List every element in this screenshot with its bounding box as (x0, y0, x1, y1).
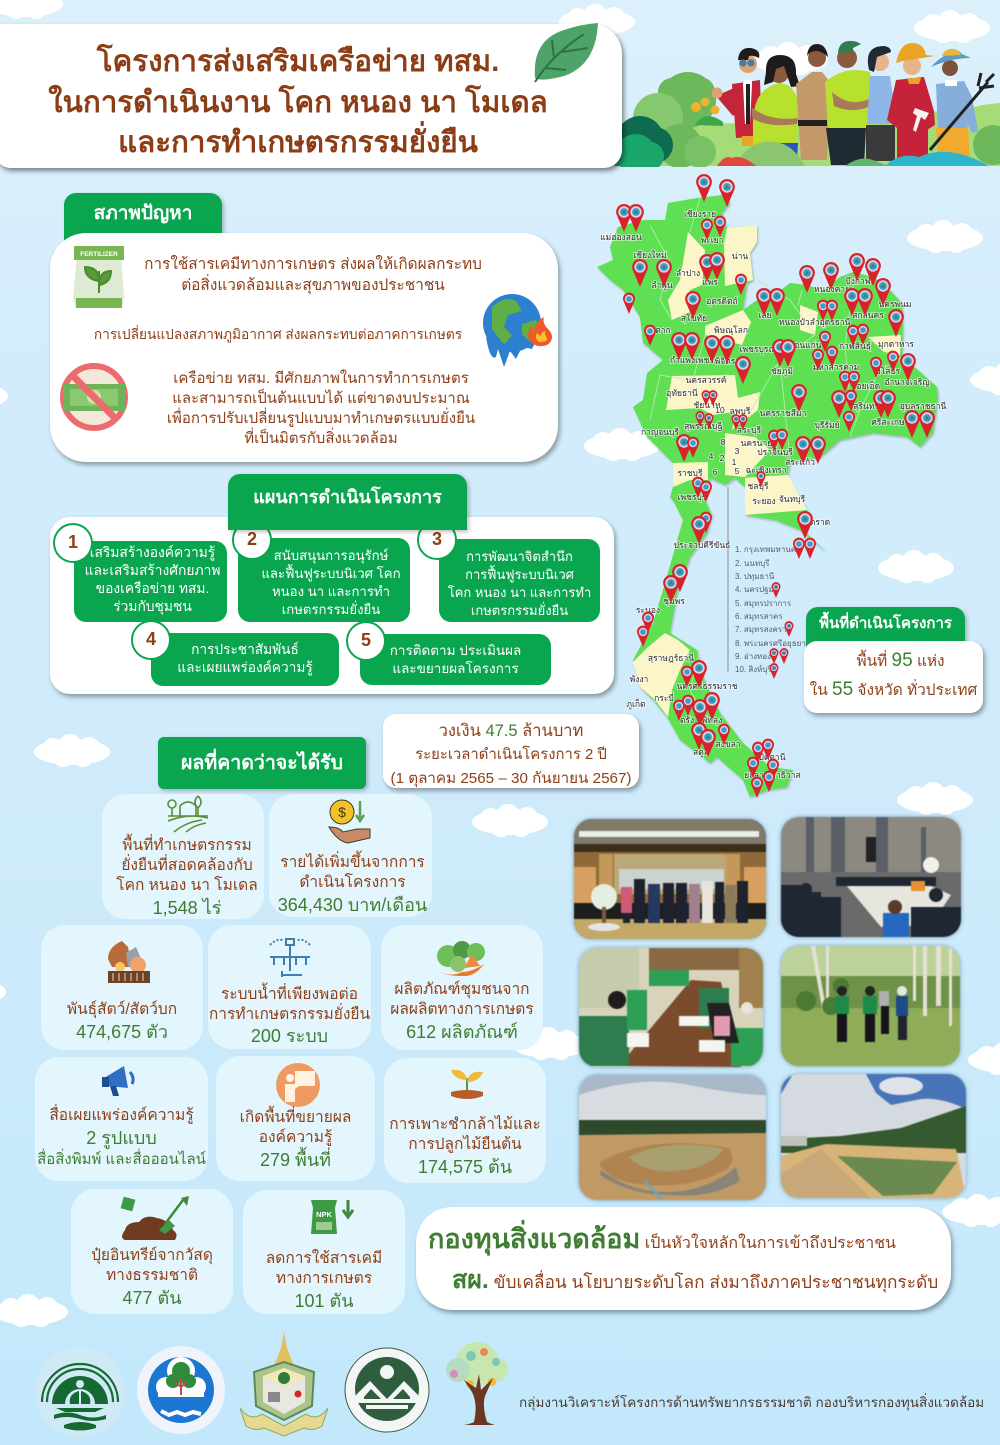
province labels: ร้อยเอ็ด (852, 380, 880, 391)
province labels: พิษณุโลก (714, 325, 748, 336)
panel: plan (50, 517, 614, 694)
province labels: แม่ฮ่องสอน (600, 232, 642, 242)
province labels: อุทัยธานี (666, 388, 698, 399)
icon: sprinkler (269, 938, 311, 977)
text: network potential (167, 370, 475, 447)
province labels: สตูล (693, 747, 709, 758)
card text: 477 ตัน (122, 1288, 182, 1308)
logo: department of environmental quality promotion (35, 1347, 125, 1437)
card: extension areas (216, 1056, 375, 1181)
card text: สื่อเผยแพร่องค์ความรู้ (49, 1107, 194, 1124)
province labels: เชียงใหม่ (633, 250, 667, 260)
fund statement panel (416, 1207, 951, 1310)
person 3 khaki uniform (796, 44, 830, 160)
icon: leaf (534, 23, 598, 82)
province labels: ราชบุรี (677, 468, 703, 479)
budget text: วงเงิน 47.5 ล้านบาท (439, 722, 583, 740)
province labels: สระบุรี (737, 425, 762, 436)
icon: vegetables (436, 941, 485, 976)
title: ในการดำเนินงาน โคก หนอง นา โมเดล (48, 86, 548, 118)
card text (209, 982, 370, 1046)
statement line 2: สผ. ขับเคลื่อน นโยบายระดับโลก ส่งมาถึงภาคประชาชนทุกระดับ (452, 1266, 938, 1294)
number 1: 1 (68, 532, 78, 552)
card text: 2 รูปแบบ (86, 1128, 157, 1148)
budget text: ระยะเวลาดำเนินโครงการ 2 ปี (415, 747, 607, 763)
card text: รายได้เพิ่มขึ้นจากการ (280, 854, 425, 871)
card text: ผลิตภัณฑ์ชุมชนจาก (394, 981, 530, 998)
province labels: เชียงราย (684, 209, 716, 219)
card text: เกิดพื้นที่ขยายผล (240, 1109, 351, 1126)
card text (266, 1249, 382, 1311)
province labels: พังงา (630, 674, 648, 684)
province labels: 4 (709, 451, 714, 461)
province labels: ลำปาง (676, 268, 700, 278)
province labels: บุรีรัมย์ (814, 420, 840, 431)
card: reduced chemicals (243, 1190, 405, 1314)
card text: ยั่งยืนที่สอดคล้องกับ (121, 857, 253, 874)
text: area count (810, 650, 978, 700)
card text: 474,675 ตัว (76, 1022, 168, 1042)
plan step 1: ของเครือข่าย ทสม. (96, 581, 209, 596)
central province list: 9. อ่างทอง (735, 652, 771, 661)
icon: coin in hand: $ (338, 804, 346, 820)
banner illustration: people and greenery (612, 40, 1000, 167)
number 2 (232, 520, 272, 560)
card text: การปลูกไม้ยืนต้น (408, 1136, 522, 1153)
card: seedlings (384, 1058, 546, 1183)
section tab: project area: พื้นที่ดำเนินโครงการ (819, 615, 952, 632)
card text: 101 ตัน (294, 1291, 354, 1311)
province labels: สระแก้ว (785, 457, 815, 467)
card: sustainable farm area (102, 794, 264, 919)
section tab: expected results (158, 737, 366, 789)
central province list: 6. สมุทรสาคร (735, 612, 783, 621)
section tab: problems: สภาพปัญหา (94, 203, 192, 224)
card text: การเพาะชำกล้าไม้และ (389, 1116, 541, 1133)
panel: project area (804, 641, 983, 713)
icon: NPK bag: NPK (316, 1210, 332, 1219)
province labels: ชุมพร (663, 596, 685, 607)
title: และการทำเกษตรกรรมยั่งยืน (118, 126, 478, 159)
number 5: 5 (361, 630, 371, 650)
icon: fertilizer bag: FERTILIZER (80, 251, 118, 258)
card text (67, 1000, 177, 1042)
text: chemical impact: ต่อสิ่งแวดล้อมและสุขภาพของประชาชน (181, 277, 445, 294)
province labels: ปัตตานี (758, 752, 786, 762)
province labels: เพชรบุรี (678, 492, 707, 503)
budget text (391, 722, 631, 788)
icon: coin in hand (328, 800, 370, 844)
province labels: อุบลราชธานี (900, 401, 946, 412)
province labels: ระนอง (636, 605, 660, 615)
icon: seedling (451, 1070, 483, 1099)
province labels: 6 (713, 467, 718, 477)
card text: ผลผลิตทางการเกษตร (390, 1001, 534, 1018)
plan step 2: และฟื้นฟูระบบนิเวศ โคก (261, 566, 401, 581)
plan step 4 (151, 633, 339, 686)
card: community products (381, 925, 543, 1050)
icon: field (167, 795, 208, 833)
section tab: plan (228, 474, 467, 530)
province labels: ฉะเชิงเทรา (745, 465, 787, 475)
province labels: ตราด (810, 517, 830, 527)
card text: ปุ๋ยอินทรีย์จากวัสดุ (91, 1247, 213, 1264)
card text: 200 ระบบ (251, 1026, 328, 1046)
province labels: หนองคาย (814, 284, 850, 294)
province labels: กระบี่ (654, 692, 674, 703)
site pins (616, 174, 935, 798)
title (48, 44, 548, 159)
province boundaries (650, 198, 902, 720)
person 1 red jacket (712, 48, 762, 146)
icon: teacher (276, 1063, 320, 1107)
province labels: เพชรบูรณ์ (740, 344, 776, 355)
province labels: อุตรดิตถ์ (706, 296, 738, 307)
province labels: ระยอง (752, 496, 776, 506)
icon: animals (108, 941, 150, 983)
card text: 174,575 ต้น (418, 1157, 512, 1177)
plan step 3: การฟื้นฟูระบบนิเวศ (465, 567, 574, 582)
province labels: แพร่ (702, 277, 718, 287)
province labels: นครราชสีมา (760, 408, 806, 418)
province labels: พะเยา (701, 235, 723, 245)
province labels: อุดรธานี (820, 317, 851, 328)
budget callout (383, 714, 639, 788)
province labels (600, 209, 946, 780)
card text (389, 1115, 541, 1177)
province labels: เลย (758, 310, 772, 320)
province labels: มุกดาหาร (878, 339, 914, 350)
plan step 5 (360, 634, 551, 685)
statement line 1: กองทุนสิ่งแวดล้อม เป็นหัวใจหลักในการเข้าถึงประชาชน (428, 1224, 896, 1254)
icon: no money (60, 363, 128, 431)
logo: natural resources and environment office (137, 1346, 225, 1434)
text: network potential: ที่เป็นมิตรกับสิ่งแวดล้อม (244, 430, 398, 447)
province labels: สุรินทร์ (853, 401, 879, 412)
card text: 279 พื้นที่ (260, 1150, 331, 1170)
text: network potential: และสามารถเป็นต้นแบบได้ แต่ขาดงบประมาณ (172, 390, 470, 407)
central province list: 4. นครปฐม (735, 585, 774, 594)
central province list: 8. พระนครศรีอยุธยา (735, 639, 806, 648)
map of Thailand (597, 174, 947, 799)
card: water system (208, 925, 371, 1049)
icon: compost and shovel (120, 1196, 189, 1240)
plan step 4: และเผยแพร่องค์ความรู้ (177, 660, 313, 675)
province labels: 5 (735, 466, 740, 476)
person 7 farmer with fork (930, 49, 994, 162)
province labels: นครนายก (741, 438, 777, 448)
province labels: หนองบัวลำภู (779, 317, 826, 328)
province labels: จันทบุรี (779, 494, 806, 505)
card: income (269, 794, 432, 917)
plan step 5: และขยายผลโครงการ (392, 661, 519, 676)
card text: พื้นที่ทำเกษตรกรรม (122, 837, 252, 854)
card text (390, 980, 534, 1042)
list divider (727, 487, 729, 672)
province labels: นครศรีธรรมราช (676, 681, 738, 691)
province labels: พิจิตร (715, 356, 736, 366)
plan step 1: ร่วมกับชุมชน (113, 599, 192, 614)
province labels: ปราจีนบุรี (757, 447, 793, 458)
plan step 4: การประชาสัมพันธ์ (191, 642, 299, 657)
person 6 red jacket and hat (887, 43, 935, 160)
card text: การทำเกษตรกรรมยั่งยืน (209, 1006, 370, 1022)
plan step 3 (439, 539, 600, 622)
plan step 5: การติดตาม ประเมินผล (390, 643, 521, 658)
logo: provincial crest (240, 1332, 328, 1436)
province labels: 10 (715, 405, 725, 415)
province labels: สงขลา (715, 739, 741, 749)
central province list: 3. ปทุมธานี (735, 572, 775, 581)
card: livestock (41, 925, 203, 1050)
card text: องค์ความรู้ (259, 1129, 332, 1146)
card text (91, 1246, 213, 1308)
card: organic fertilizer (71, 1189, 233, 1314)
number 5 (346, 621, 386, 661)
cream provinces (633, 225, 901, 717)
province labels: กาญจนบุรี (641, 427, 679, 438)
photo: seminar round table (781, 817, 961, 937)
province labels: น่าน (732, 251, 748, 261)
card: media (35, 1057, 208, 1181)
card text (116, 834, 258, 918)
province labels: กาฬสินธุ์ (839, 341, 871, 352)
text: network potential: เพื่อการปรับเปลี่ยนรูปแบบมาทำเกษตรแบบยั่งยืน (167, 410, 475, 427)
person 4 lime polo and cap (825, 41, 877, 165)
title: โครงการส่งเสริมเครือข่าย ทสม. (97, 45, 499, 78)
province labels: ลำพูน (651, 280, 673, 291)
photo: group at meeting room (574, 819, 766, 939)
card text: 1,548 ไร่ (153, 898, 221, 918)
number 2: 2 (247, 529, 257, 549)
plan step 3: การพัฒนาจิตสำนึก (466, 549, 573, 564)
province labels: ขอนแก่น (788, 340, 822, 350)
province labels: ยโสธร (876, 366, 901, 376)
central province list: 1. กรุงเทพมหานคร (735, 545, 801, 554)
text: area count: พื้นที่ 95 แห่ง (856, 650, 945, 671)
card text: ลดการใช้สารเคมี (266, 1250, 382, 1267)
province labels: สุราษฎร์ธานี (648, 653, 694, 664)
person 2 lime polo (752, 55, 800, 159)
province labels: 9 (718, 423, 723, 433)
number 3 (417, 520, 457, 560)
central province list: 5. สมุทรปราการ (735, 599, 792, 608)
province labels: สกลนคร (852, 310, 884, 320)
section tab: plan: แผนการดำเนินโครงการ (253, 487, 442, 507)
icon: megaphone (102, 1066, 135, 1096)
text: chemical impact: การใช้สารเคมีทางการเกษตร ส่งผลให้เกิดผลกระทบ (144, 256, 482, 273)
photo: walking in the forest (781, 946, 960, 1066)
number 1 (53, 523, 93, 563)
province labels: ชลบุรี (748, 481, 769, 492)
card text (278, 850, 427, 915)
province labels: กำแพงเพชร (670, 355, 714, 365)
number 4: 4 (146, 629, 156, 649)
number 4 (131, 620, 171, 660)
card text (37, 1104, 206, 1168)
province labels: บึงกาฬ (845, 276, 872, 286)
text: network potential: เครือข่าย ทสม. มีศักยภาพในการทำการเกษตร (173, 370, 469, 387)
province labels: ยะลา (744, 770, 764, 780)
province labels: ภูเก็ต (626, 698, 646, 710)
province labels: นครสวรรค์ (686, 375, 726, 385)
logo: community tree (446, 1342, 508, 1425)
province labels: มหาสารคาม (813, 362, 859, 372)
plan step 3: โคก หนอง นา และการทำ (448, 585, 591, 600)
map land (597, 195, 938, 797)
number 3: 3 (432, 529, 442, 549)
section tab: project area (806, 607, 965, 650)
card text: สื่อสิ่งพิมพ์ และสื่อออนไลน์ (37, 1151, 206, 1168)
photo: pond construction (579, 1075, 766, 1200)
province labels: ศรีสะเกษ (871, 417, 905, 427)
section tab: problems (64, 193, 222, 245)
plan step 2 (238, 538, 410, 622)
plan step 1 (74, 541, 227, 622)
text: chemical impact (144, 255, 482, 294)
text: climate change: การเปลี่ยนแปลงสภาพภูมิอากาศ ส่งผลกระทบต่อภาคการเกษตร (94, 327, 462, 342)
logo: local administration seal (344, 1348, 430, 1432)
section tab: expected results: ผลที่คาดว่าจะได้รับ (181, 752, 343, 774)
plan step 1: และเสริมสร้างศักยภาพ (85, 563, 220, 578)
province labels: นครพนม (878, 299, 912, 309)
province labels: ตาก (655, 325, 671, 335)
province labels: อำนาจเจริญ (884, 377, 930, 387)
card text (240, 1106, 351, 1170)
card text: โคก หนอง นา โมเดล (116, 877, 258, 894)
card text: 364,430 บาท/เดือน (278, 895, 427, 915)
footer credit: กลุ่มงานวิเคราะห์โครงการด้านทรัพยากรธรรมชาติ กองบริหารกองทุนสิ่งแวดล้อม (519, 1395, 984, 1410)
central province list: 10. สิงห์บุรี (735, 664, 772, 674)
central province list: 2. นนทบุรี (735, 559, 770, 568)
province labels: 2 (720, 453, 725, 463)
icon: fertilizer bag (73, 246, 124, 308)
photo: green pond (781, 1074, 966, 1198)
card text: 612 ผลิตภัณฑ์ (406, 1022, 518, 1042)
province labels: ลพบุรี (730, 406, 751, 417)
province labels: ประจวบคีรีขันธ์ (674, 540, 730, 550)
photo: community meeting table (579, 948, 763, 1067)
province labels: นราธิวาส (765, 770, 801, 780)
province labels: ตรัง (680, 715, 694, 725)
text: area count: ใน 55 จังหวัด ทั่วประเทศ (810, 679, 977, 700)
province labels: 3 (735, 446, 740, 456)
plan step 1: เสริมสร้างองค์ความรู้ (90, 545, 215, 560)
card text: ทางธรรมชาติ (106, 1267, 198, 1284)
province labels: ชัยภูมิ (771, 366, 793, 377)
plan step 2: เกษตรกรรมยั่งยืน (282, 602, 380, 617)
province labels: 8 (721, 437, 726, 447)
central province list (735, 545, 806, 674)
person 5 blue shirt (866, 46, 897, 161)
plan step 2: สนับสนุนการอนุรักษ์ (274, 548, 388, 563)
title panel (0, 24, 622, 168)
card text: ดำเนินโครงการ (299, 874, 406, 891)
plan step 2: หนอง นา และการทำ (272, 584, 390, 599)
card text: พันธุ์สัตว์/สัตว์บก (67, 1001, 177, 1018)
plan step 3: เกษตรกรรมยั่งยืน (471, 603, 568, 618)
province labels: 1 (732, 457, 737, 467)
province labels: สุโขทัย (681, 313, 707, 324)
province labels: พัทลุง (702, 715, 722, 726)
card text: ทางการเกษตร (276, 1270, 372, 1287)
icon: NPK bag (311, 1200, 354, 1234)
province labels: สุพรรณบุรี (684, 421, 722, 432)
panel: problems (50, 233, 558, 462)
central province list: 7. สมุทรสงคราม (735, 625, 792, 634)
budget text: (1 ตุลาคม 2565 – 30 กันยายน 2567) (391, 770, 631, 787)
icon: melting globe with fire (483, 294, 552, 367)
card text: ระบบน้ำที่เพียงพอต่อ (221, 986, 358, 1003)
province labels: ชัยนาท (694, 400, 721, 410)
